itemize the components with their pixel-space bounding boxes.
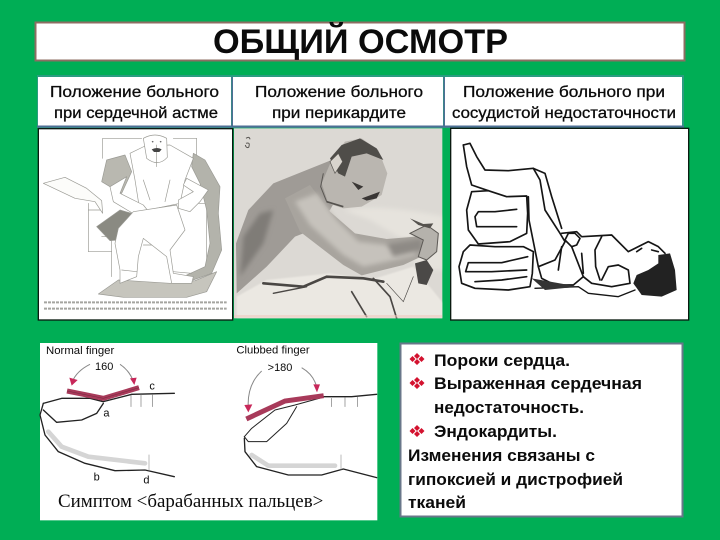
pillow bbox=[43, 177, 103, 213]
caption: Симптом <барабанных пальцев> bbox=[58, 491, 323, 512]
heading: vascular insufficiency: сосудистой недостаточности bbox=[452, 105, 676, 122]
header row bbox=[37, 75, 684, 128]
arm left bbox=[110, 177, 150, 217]
chair bbox=[88, 138, 207, 277]
torso bbox=[130, 145, 193, 212]
body bbox=[538, 242, 583, 285]
panel: clubbed finger diagram bbox=[40, 343, 377, 520]
title: ОБЩИЙ ОСМОТР bbox=[213, 22, 508, 61]
finger outline bbox=[40, 393, 174, 477]
list text: Выраженная сердечная bbox=[434, 374, 642, 393]
caption lines bbox=[44, 302, 227, 309]
head bbox=[322, 138, 387, 208]
normal finger: c bbox=[149, 380, 155, 392]
clubbed finger: >180 bbox=[268, 362, 292, 374]
title bbox=[36, 22, 684, 61]
list text: Эндокардиты. bbox=[434, 422, 557, 441]
foot bbox=[463, 143, 562, 228]
floor drape bbox=[98, 272, 217, 297]
sheet bbox=[237, 267, 443, 318]
list text: Пороки сердца. bbox=[434, 351, 570, 370]
list text: тканей bbox=[408, 493, 466, 512]
nail angle bar bbox=[67, 388, 139, 398]
heading: pericarditis: при перикардите bbox=[272, 105, 406, 122]
normal finger: d bbox=[143, 474, 149, 486]
arrows bbox=[72, 364, 134, 382]
leg bbox=[528, 197, 538, 267]
heading: pericarditis bbox=[255, 84, 423, 122]
fold lines bbox=[263, 277, 413, 318]
clubbed finger bbox=[236, 344, 377, 478]
hair bbox=[633, 253, 677, 297]
heading: vascular insufficiency bbox=[452, 84, 676, 122]
clubbed finger: Clubbed finger bbox=[236, 344, 310, 356]
panel: patient lying with raised legs bbox=[451, 128, 689, 320]
arm right bbox=[178, 178, 208, 212]
arm bbox=[285, 185, 427, 275]
normal finger: 160 bbox=[95, 361, 113, 373]
head bbox=[143, 135, 167, 163]
normal finger: Normal finger bbox=[46, 345, 115, 357]
dark drape on lap bbox=[97, 210, 168, 241]
panel: sitting patient drawing bbox=[38, 129, 233, 320]
heading: vascular insufficiency: Положение больного при bbox=[463, 84, 665, 101]
torso bbox=[236, 160, 333, 294]
heading: cardiac asthma: Положение больного bbox=[50, 84, 219, 101]
heading: cardiac asthma: при сердечной астме bbox=[54, 105, 218, 122]
heading: cardiac asthma bbox=[50, 84, 219, 122]
list text bbox=[408, 351, 642, 512]
legs bbox=[115, 205, 193, 283]
left shoulder drape bbox=[102, 155, 132, 193]
normal finger: b bbox=[94, 472, 100, 484]
bullet icons bbox=[410, 353, 424, 437]
normal finger bbox=[40, 345, 174, 486]
upper pillow bbox=[467, 191, 528, 244]
lower pillow bbox=[459, 245, 533, 290]
panel: pericarditis patient photo bbox=[234, 128, 443, 318]
hands bbox=[410, 225, 438, 260]
normal finger: a bbox=[103, 408, 110, 420]
panel: causes text bbox=[400, 344, 682, 516]
list text: недостаточность. bbox=[434, 398, 584, 417]
heading: pericarditis: Положение больного bbox=[255, 84, 423, 101]
list text: гипоксией и дистрофией bbox=[408, 470, 623, 489]
list text: Изменения связаны с bbox=[408, 446, 595, 465]
right drape bbox=[187, 153, 222, 280]
